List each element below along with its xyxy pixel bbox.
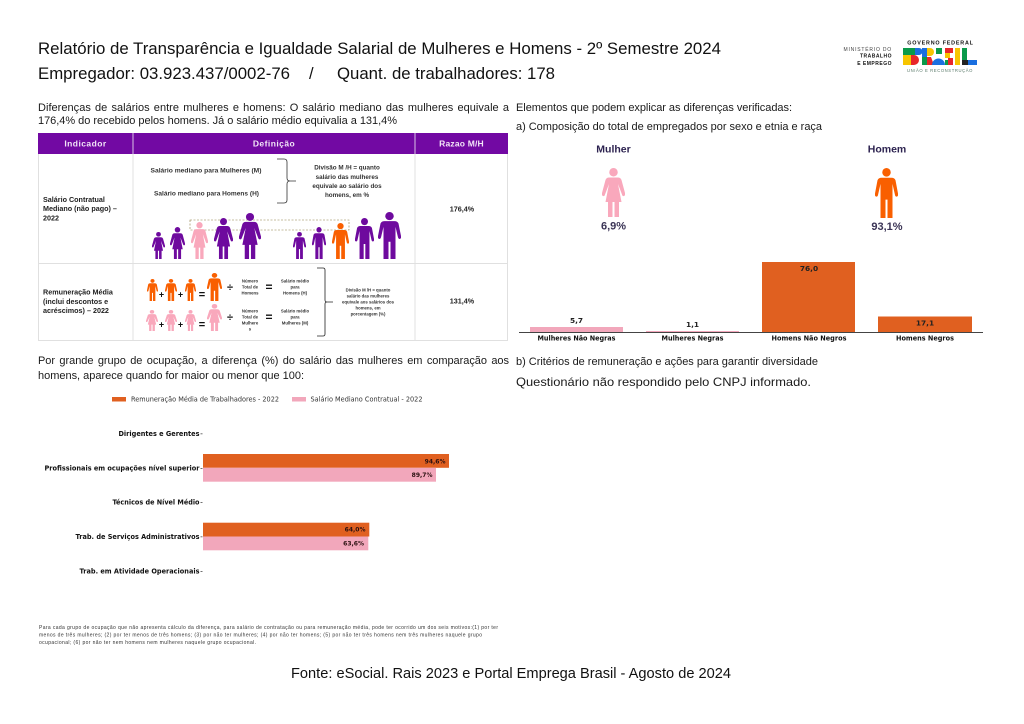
- panel: woman share: 6,9%: [601, 220, 626, 232]
- row 2 women sum equation: Total de: [242, 314, 259, 320]
- row 2 men sum equation: +: [178, 290, 183, 300]
- category: Trab. em Atividade Operacionais: Trab. em Atividade Operacionais: [80, 568, 200, 576]
- row 2 division text: salário das mulheres: [347, 294, 390, 298]
- bar chart: composition by sex and race: [519, 262, 983, 342]
- logo: Governo Federal Brasil: UNIÃO E RECONSTRUÇÃO: [907, 68, 973, 73]
- row 2 indicator label: (inclui descontos e: [43, 297, 108, 306]
- logo: Ministério do Trabalho e Emprego: E EMPREGO: [857, 61, 892, 67]
- row 2 women sum equation: ÷: [227, 312, 233, 324]
- row 2 brace: [317, 268, 333, 336]
- left text: occupation groups: homens, aparece quando for maior ou menor que 100:: [38, 370, 304, 382]
- panel: man share: [868, 144, 906, 233]
- table header: Indicador: [64, 138, 107, 148]
- bar: Mulheres Negras: Mulheres Negras: [662, 334, 724, 342]
- table header: Definição: [253, 138, 295, 148]
- category: Dirigentes e Gerentes: Dirigentes e Gerentes: [118, 430, 200, 438]
- title: Quant. de trabalhadores: 178: [337, 65, 555, 83]
- panel: woman share: Mulher: [596, 144, 631, 156]
- bar chart: occupation groups: [44, 430, 449, 576]
- right text: remuneration criteria: [516, 356, 818, 389]
- row 2 men sum equation: =: [265, 280, 273, 294]
- intro text: salary differences: 176,4% do recebido pelos homens. Já o salário médio equivalia a 131,4%: [38, 115, 397, 127]
- row 2 division text: homens, em: [355, 306, 381, 310]
- bar: Mulheres Não Negras: [530, 316, 623, 342]
- row 2 men sum equation: para: [290, 284, 300, 290]
- row 2 women sum equation: =: [265, 310, 273, 324]
- legend: [112, 396, 422, 404]
- row 2 ratio: 131,4%: [450, 296, 475, 306]
- bar: Homens Negros: [878, 316, 972, 342]
- icons: women by height: [152, 213, 261, 259]
- row 2 indicator label: [43, 288, 114, 315]
- row 2 men sum equation: Salário médio: [281, 278, 309, 284]
- footnote: Para cada grupo de ocupação que não apresenta cálculo da diferença, para salário de contratação ou para remuneração média, pode ter ocorrido um dos seis motivos:(1) por ter: [39, 625, 498, 631]
- bar: Homens Negros: Homens Negros: [896, 334, 955, 342]
- row 1 median labels: Salário mediano para Homens (H): [154, 190, 259, 198]
- category: Trab. de Serviços Administrativos: [76, 523, 369, 550]
- right text: remuneration criteria: b) Critérios de remuneração e ações para garantir diversidade: [516, 356, 818, 368]
- bar: Mulheres Não Negras: 5,7: [570, 316, 583, 325]
- title: Relatório de Transparência e Igualdade Salarial de Mulheres e Homens - 2º Semestre 2024: [38, 40, 721, 58]
- row 2 men sum equation: Total de: [242, 284, 259, 290]
- panel: man share: 93,1%: [871, 221, 903, 233]
- panel: woman share: [596, 144, 631, 232]
- row 2 men sum equation: =: [199, 289, 205, 301]
- category: Profissionais em ocupações nível superior: [44, 454, 449, 482]
- right heading: explanatory elements: a) Composição do total de empregados por sexo e etnia e raça: [516, 121, 823, 133]
- row 1 division text: [312, 164, 382, 199]
- bar: Homens Negros: 17,1: [916, 318, 934, 328]
- row 1 median labels: Salário mediano para Mulheres (M): [150, 168, 262, 174]
- row 1 division text: Divisão M /H = quanto: [314, 164, 380, 172]
- row 2 men sum equation: ÷: [227, 282, 233, 294]
- footnote: menos de três mulheres; (2) por ter menos de três homens; (3) por não ter mulheres; (4) por não ter homens; (5) por não ter três homens nem três mulheres naquele grupo: [39, 632, 482, 638]
- bar: Mulheres Negras: [646, 320, 739, 342]
- source line: Fonte: eSocial. Rais 2023 e Portal Emprega Brasil - Agosto de 2024: [291, 666, 731, 682]
- left text: occupation groups: [38, 355, 510, 382]
- icons: men by height: [293, 212, 401, 259]
- category: Técnicos de Nível Médio: Técnicos de Nível Médio: [112, 498, 200, 506]
- row 1 brace: [277, 159, 296, 203]
- row 2 division text: Divisão M /H = quanto: [346, 288, 391, 292]
- row 1 indicator label: [43, 195, 117, 222]
- footnote: [39, 625, 498, 646]
- row 2 men sum equation: +: [159, 290, 164, 300]
- row 1 ratio: 176,4%: [450, 204, 475, 214]
- row 1 dashed highlight: [190, 220, 349, 230]
- left text: occupation groups: Por grande grupo de ocupação, a diferença (%) do salário das mulheres em comparação aos: [38, 355, 510, 367]
- logo: Governo Federal Brasil: GOVERNO FEDERAL: [907, 40, 974, 46]
- right text: remuneration criteria: Questionário não respondido pelo CNPJ informado.: [516, 375, 811, 389]
- row 1 indicator label: 2022: [43, 214, 59, 222]
- row 2 women sum equation: Salário médio: [281, 308, 309, 314]
- title: /: [309, 65, 314, 83]
- row 1 median labels: [150, 168, 262, 198]
- bar: Homens Não Negros: [762, 262, 855, 342]
- logo: Ministério do Trabalho e Emprego: MINISTÉRIO DO: [844, 46, 892, 53]
- intro text: salary differences: Diferenças de salários entre mulheres e homens: O salário mediano das mulheres equivale a: [38, 102, 510, 114]
- row 2 women sum equation: =: [199, 319, 205, 331]
- panel: indicator table: [38, 133, 508, 340]
- row 2 indicator label: acréscimos) – 2022: [43, 306, 109, 315]
- title: [38, 40, 721, 83]
- logo: Ministério do Trabalho e Emprego: [844, 46, 892, 67]
- row 2 men sum equation: Homens (H): [283, 290, 308, 296]
- row 2 indicator label: Remuneração Média: [43, 288, 114, 296]
- category: Profissionais em ocupações nível superior: 94,6%: [425, 458, 446, 466]
- bar: Homens Não Negros: Homens Não Negros: [772, 334, 847, 342]
- bar: Mulheres Negras: 1,1: [686, 320, 699, 329]
- row 2 women sum equation: Mulheres (M): [282, 320, 309, 326]
- bar: Mulheres Não Negras: Mulheres Não Negras: [538, 334, 616, 342]
- row 2 women sum equation: [146, 304, 309, 332]
- category: Trab. de Serviços Administrativos: Trab. de Serviços Administrativos: [76, 533, 200, 541]
- row 2 division text: porcentagem (%): [351, 312, 386, 316]
- row 2 men sum equation: [147, 273, 309, 301]
- table header: Razao M/H: [439, 138, 484, 148]
- row 1 indicator label: Salário Contratual: [43, 195, 105, 204]
- right heading: explanatory elements: Elementos que podem explicar as diferenças verificadas:: [516, 102, 792, 114]
- row 2 division text: equivale aos salários dos: [342, 300, 395, 304]
- right heading: explanatory elements: [516, 102, 823, 133]
- table header: [38, 133, 508, 154]
- logo: Governo Federal Brasil: [903, 40, 977, 73]
- logo: Ministério do Trabalho e Emprego: TRABALHO: [860, 54, 892, 60]
- row 2 women sum equation: +: [178, 320, 183, 330]
- row 2 women sum equation: para: [290, 314, 300, 320]
- row 1 indicator label: Mediano (não pago) –: [43, 204, 117, 213]
- row 1 division text: homens, em %: [325, 192, 369, 199]
- row 1 division text: salário das mulheres: [316, 174, 379, 181]
- panel: man share: Homem: [868, 144, 906, 156]
- row 2 division text: [342, 288, 395, 316]
- row 1 division text: equivale ao salário dos: [312, 183, 382, 190]
- row 2 men sum equation: Homens: [242, 290, 259, 296]
- row 2 women sum equation: +: [159, 320, 164, 330]
- row 2 women sum equation: Número: [242, 308, 258, 314]
- legend: Salário Mediano Contratual - 2022: [310, 396, 422, 404]
- bar: Homens Não Negros: 76,0: [800, 264, 818, 273]
- row 2 women sum equation: s: [249, 326, 252, 332]
- category: Trab. de Serviços Administrativos: 63,6%: [343, 540, 364, 548]
- row 2 women sum equation: Mulhere: [242, 320, 259, 326]
- legend: Remuneração Média de Trabalhadores - 2022: [131, 396, 279, 404]
- intro text: salary differences: [38, 102, 510, 127]
- category: Profissionais em ocupações nível superior: Profissionais em ocupações nível superior: [44, 464, 200, 472]
- row 2 men sum equation: Número: [242, 278, 258, 284]
- category: Profissionais em ocupações nível superior: 89,7%: [412, 472, 432, 479]
- title: Empregador: 03.923.437/0002-76: [38, 65, 290, 83]
- category: Trab. de Serviços Administrativos: 64,0%: [345, 527, 366, 534]
- footnote: ocupacional; (6) por não ter nem homens nem mulheres naquele grupo ocupacional.: [39, 640, 256, 646]
